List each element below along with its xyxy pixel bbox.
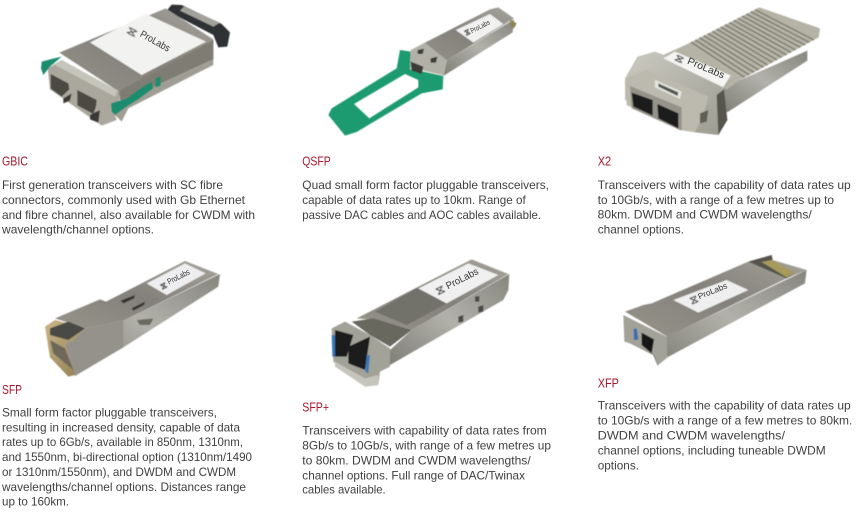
text block: XFP description: options. [598, 458, 639, 472]
icon: GBIC transceiver [41, 5, 230, 126]
text block: X2 description: to 10Gb/s, with a range of a few metres up to [598, 193, 834, 207]
icon: QSFP transceiver [328, 7, 517, 136]
text block: SFP+ description: 8Gb/s to 10Gb/s, with range of a few metres up [302, 439, 551, 453]
text block: SFP description: Small form factor pluggable transceivers, [2, 406, 217, 420]
heading: SFP+: SFP+ [302, 400, 329, 415]
text block: GBIC description: First generation transceivers with SC fibre [2, 178, 223, 192]
text block: SFP description: resulting in increased density, capable of data [2, 421, 240, 435]
text block: XFP description: to 10Gb/s with a range of a few metres to 80km. [598, 414, 852, 428]
heading: SFP: SFP [2, 382, 22, 397]
text block: X2 description: channel options. [598, 222, 684, 236]
text block: SFP description: or 1310nm/1550nm), and DWDM and CWDM [2, 465, 236, 479]
heading: GBIC: GBIC [2, 154, 28, 169]
heading: QSFP: QSFP [302, 154, 331, 169]
text block: X2 description [598, 178, 851, 236]
text block: GBIC description: and fibre channel, also available for CWDM with [2, 208, 255, 222]
panel: X2: ProLabs [685, 56, 726, 81]
icon: XFP transceiver [623, 255, 807, 366]
text block: SFP+ description: to 80km. DWDM and CWDM wavelengths/ [302, 454, 531, 468]
panel: GBIC: ProLabs [138, 29, 172, 54]
panel: SFP [1, 261, 252, 509]
heading: X2: X2 [598, 154, 611, 169]
text block: SFP+ description: cables available. [302, 483, 386, 497]
panel: QSFP [302, 7, 549, 222]
text block: GBIC description: wavelength/channel options. [1, 222, 154, 236]
text block: GBIC description: connectors, commonly used with Gb Ethernet [2, 193, 246, 207]
text block: SFP+ description: channel options. Full range of DAC/Twinax [302, 469, 525, 483]
text block: QSFP description: Quad small form factor pluggable transceivers, [302, 178, 549, 192]
text block: SFP+ description: Transceivers with capability of data rates from [302, 423, 547, 437]
panel: SFP+ [302, 259, 551, 497]
text block: QSFP description: capable of data rates up to 10km. Range of [302, 193, 526, 207]
text block: XFP description: DWDM and CWDM wavelengths/ [598, 429, 786, 443]
text block: GBIC description [1, 178, 255, 236]
panel: XFP [598, 255, 852, 472]
panel: QSFP: ProLabs [469, 18, 492, 35]
text block: QSFP description: passive DAC cables and AOC cables available. [302, 208, 541, 222]
heading: XFP: XFP [598, 376, 619, 391]
text block: SFP description: and 1550nm, bi-directional option (1310nm/1490 [2, 450, 252, 464]
text block: XFP description [598, 399, 852, 472]
text block: XFP description: channel options, including tuneable DWDM [598, 443, 826, 457]
text block: X2 description: Transceivers with the capability of data rates up [598, 178, 851, 192]
text block: SFP description: up to 160km. [2, 495, 69, 509]
text block: QSFP description [302, 178, 549, 222]
panel: GBIC [1, 5, 255, 236]
icon: SFP transceiver [45, 261, 220, 377]
text block: SFP description: wavelengths/channel options. Distances range [1, 480, 246, 494]
icon: X2 transceiver [625, 7, 820, 135]
panel: X2 [598, 7, 851, 236]
text block: SFP description [1, 406, 252, 509]
panel: SFP+: ProLabs [444, 266, 481, 292]
panel: SFP: ProLabs [165, 267, 191, 286]
text block: SFP description: rates up to 6Gb/s, available in 850nm, 1310nm, [2, 435, 243, 449]
text block: SFP+ description [302, 423, 551, 497]
panel: XFP: ProLabs [696, 280, 729, 301]
text block: XFP description: Transceivers with the capability of data rates up [598, 399, 851, 413]
text block: X2 description: 80km. DWDM and CWDM wavelengths/ [598, 208, 812, 222]
icon: SFP+ transceiver [332, 259, 509, 387]
